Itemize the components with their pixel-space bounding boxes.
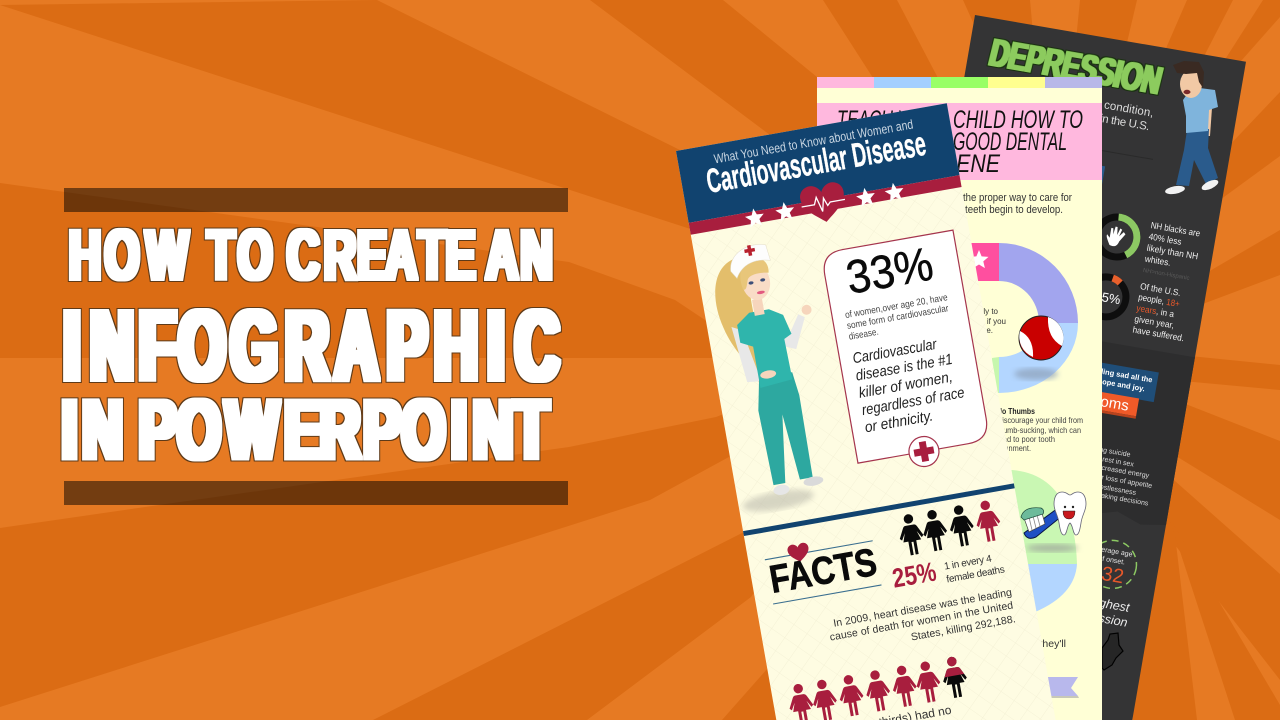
donut chart one — [970, 243, 1078, 393]
icon: state map — [1102, 633, 1123, 670]
man left shoe — [1164, 185, 1186, 195]
dashed circle: average age of onset: average age — [1093, 545, 1133, 559]
dashed circle: average age of onset — [1085, 537, 1140, 592]
pink heading band: CHILD HOW TO — [953, 106, 1083, 134]
text: adults statistic: given year, — [1134, 314, 1175, 330]
text: NH blacks statistic: likely than NH — [1146, 243, 1199, 261]
intro text — [1099, 99, 1154, 134]
callout statement: regardless of race — [860, 384, 966, 419]
trousers — [753, 372, 814, 485]
header band: Cardiovascular Disease — [704, 125, 929, 201]
callout: blue box — [1034, 352, 1159, 402]
heading: highest depression: Highest — [1086, 594, 1131, 615]
illustration: sad man — [1164, 61, 1220, 195]
heading: facts: FACTS — [766, 541, 880, 602]
fringe — [737, 257, 771, 290]
pictogram: 1 in 4 women — [896, 499, 1003, 557]
tunic — [735, 306, 800, 390]
big stat: 33% — [842, 237, 937, 304]
callout: symptoms banner: Symptoms — [1057, 386, 1130, 415]
stars — [744, 181, 905, 228]
text: no thumbs: Discourage your child from — [997, 415, 1083, 425]
man right arm — [1205, 108, 1212, 136]
stat: 25 percent: 25% — [890, 556, 939, 594]
divider — [743, 483, 1015, 536]
heading: highest depression: Depression — [1064, 605, 1129, 630]
icon: heart with pulse — [798, 181, 848, 226]
pink heading band: GOOD DENTAL — [953, 128, 1067, 156]
text: NH blacks statistic: whites. — [1143, 253, 1172, 268]
blue accent — [1068, 161, 1105, 188]
right shoe — [803, 475, 824, 487]
text: adults statistic: years, in a — [1136, 303, 1175, 319]
intro text: teeth begin to develop. — [965, 204, 1063, 216]
left shoe — [773, 484, 790, 496]
illustration: nurse — [698, 236, 845, 516]
man shirt — [1183, 87, 1218, 133]
callout: symptoms banner — [1020, 379, 1139, 419]
nurse cap — [727, 243, 772, 279]
text: NH blacks statistic: 40% less — [1148, 231, 1183, 247]
header band — [676, 103, 962, 235]
title line 2: INFOGRAPHIC — [64, 290, 559, 402]
right hand — [801, 304, 812, 316]
dashed circle: average age of onset: of onset. — [1098, 555, 1126, 566]
donut label: likely to — [971, 307, 999, 316]
pictogram: two-thirds of women — [786, 655, 970, 720]
text: NH blacks statistic: NH blacks are — [1150, 220, 1201, 238]
text: adults statistic: have suffered. — [1132, 325, 1185, 343]
symptoms list: fatigue, decreased energy — [1069, 459, 1150, 480]
shadow under tooth — [1026, 544, 1078, 552]
stat caption — [943, 552, 1006, 585]
stat caption — [844, 292, 952, 343]
man mouth — [1184, 90, 1190, 94]
shadow under ball — [1014, 368, 1058, 380]
man right shoe — [1200, 178, 1220, 192]
icon: ring 5 percent — [1079, 270, 1133, 324]
header band: What You Need to Know about Women and — [713, 117, 914, 166]
heading: depression: DEPRESSION — [985, 32, 1166, 103]
paragraph: cause of death for women in the United — [829, 599, 1014, 644]
icon: ring with hand — [1092, 212, 1142, 262]
symptoms list: irritability, restlessness — [1066, 478, 1137, 497]
callout statement: or ethnicity. — [863, 408, 934, 436]
stat caption: female deaths — [946, 564, 1006, 585]
panel: depression infographic (back) — [822, 15, 1246, 720]
top bar — [64, 188, 568, 212]
text: no thumbs: thumb-sucking, which can — [997, 425, 1081, 435]
symptoms list: thinking suicide — [1083, 444, 1131, 459]
text fragment: they'll — [1039, 638, 1066, 650]
donut label: tube. — [975, 326, 993, 335]
man hair — [1173, 61, 1204, 88]
stat caption: some form of cardiovascular — [846, 303, 949, 332]
eyes — [748, 278, 766, 285]
icon: red cross badge — [907, 434, 941, 469]
intro text: condition, — [1103, 99, 1154, 120]
colour strip — [817, 77, 1102, 88]
text: no thumbs: No Thumbs — [997, 406, 1035, 416]
donut label — [967, 307, 1006, 335]
right sleeve — [777, 313, 810, 352]
footnote: NH=non-Hispanic — [1142, 268, 1190, 282]
icon: toothbrush — [1021, 508, 1062, 538]
stat caption: of women,over age 20, have — [844, 292, 949, 321]
symptoms list — [1060, 441, 1157, 508]
callout: blue box: feeling sad all the — [1090, 365, 1153, 384]
heading: highest depression — [1064, 590, 1131, 630]
title — [62, 215, 559, 477]
panel: cardiovascular disease infographic (front) — [676, 103, 1072, 720]
dashed circle: average age of onset: 32 — [1100, 563, 1125, 588]
callout: blue box: hope and joy. — [1097, 376, 1146, 393]
stat caption: 1 in every 4 — [943, 553, 993, 573]
paragraph — [827, 586, 1018, 657]
intro text — [963, 192, 1072, 216]
face — [739, 262, 773, 302]
icon: tooth — [1054, 492, 1086, 535]
shadow — [741, 485, 815, 516]
neck — [752, 298, 765, 316]
man left arm — [1185, 102, 1192, 134]
lips — [757, 290, 765, 295]
intro text: the proper way to care for — [963, 192, 1072, 204]
callout statement: killer of women, — [857, 369, 954, 402]
callout statement: disease is the #1 — [854, 351, 954, 385]
text: no thumbs: lead to poor tooth — [997, 434, 1055, 444]
symptoms list: overeating or loss of appetite — [1063, 468, 1153, 490]
bottom bar — [64, 481, 568, 505]
hand on hip — [760, 369, 777, 380]
panel: dental hygiene infographic (middle) — [817, 77, 1102, 720]
callout statement — [851, 333, 969, 436]
text: adults statistic: people, 18+ — [1138, 292, 1181, 309]
symptoms list: difficulty making decisions — [1068, 487, 1149, 508]
text: adults statistic — [1132, 281, 1192, 343]
cap cross — [744, 244, 756, 257]
text: no thumbs — [997, 406, 1083, 453]
icon: ball — [1019, 316, 1063, 360]
intro text: in the U.S. — [1099, 113, 1150, 133]
callout card — [821, 230, 993, 478]
paragraph: States, killing 292,188. — [910, 613, 1016, 643]
ponytail — [709, 257, 766, 389]
text: NH blacks statistic — [1143, 220, 1203, 272]
left sleeve — [731, 323, 767, 385]
pink heading band — [817, 103, 1102, 180]
title line 3: IN POWERPOINT — [62, 383, 549, 477]
pink heading band: HYGIENE — [904, 150, 1000, 178]
icon: ring 5 percent: 6.5% — [1090, 287, 1122, 307]
text: adults statistic: Of the U.S. — [1139, 281, 1182, 298]
text: no thumbs: alignment. — [997, 443, 1031, 453]
man trousers — [1176, 129, 1218, 186]
donut label: teeth if you — [967, 317, 1006, 326]
donut chart two — [1000, 470, 1077, 612]
stat caption: disease. — [848, 327, 879, 343]
man face — [1180, 70, 1202, 98]
ribbon — [1040, 677, 1079, 698]
symptoms list: loss of interest in sex — [1069, 451, 1135, 469]
pink heading band: TEACH YOUR — [837, 106, 945, 134]
callout statement: Cardiovascular — [851, 336, 939, 367]
title line 1: HOW TO CREATE AN — [69, 215, 553, 295]
paragraph: In 2009, heart disease was the leading — [832, 586, 1013, 630]
